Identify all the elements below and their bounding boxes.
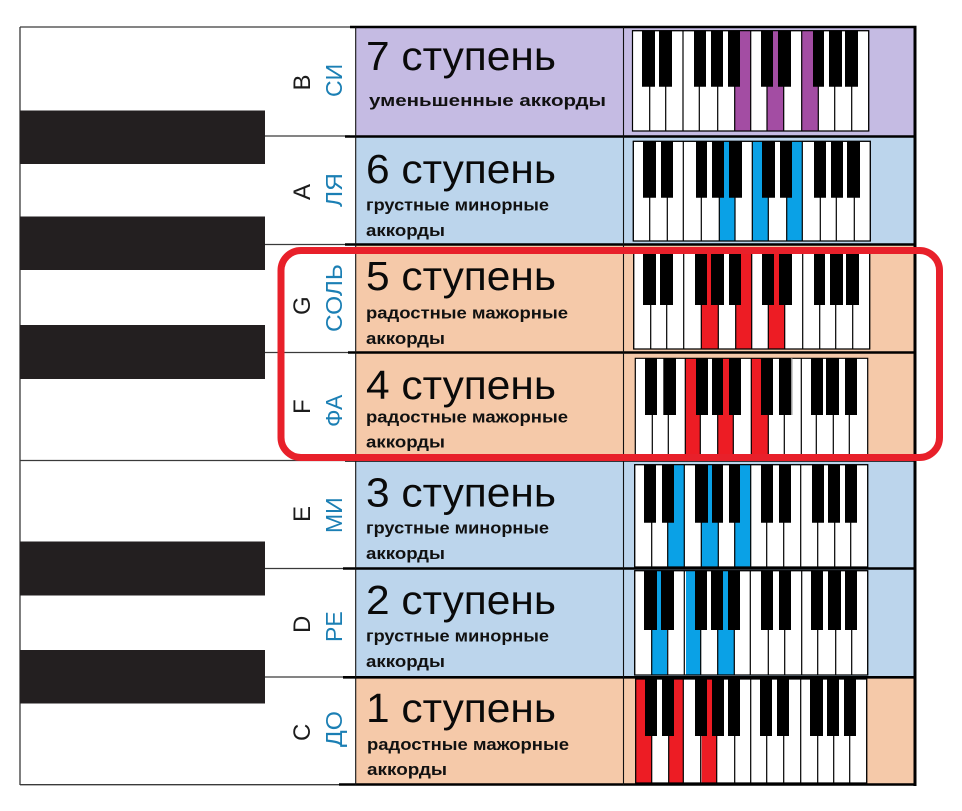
note label G: G xyxy=(289,296,316,315)
panel: 5th degree background xyxy=(356,244,915,352)
note label D: D xyxy=(289,616,316,633)
description: sad minor chords: аккорды xyxy=(366,545,445,563)
row: 6th degree xyxy=(289,136,915,244)
panel: 3rd degree background xyxy=(356,460,915,568)
heading: 6 ступень: 6 ступень xyxy=(366,146,556,192)
description: happy major chords: аккорды xyxy=(367,761,447,779)
heading: 7 ступень: 7 ступень xyxy=(366,33,556,79)
note label ЛЯ: ЛЯ xyxy=(321,173,347,207)
note label РЕ: РЕ xyxy=(321,611,347,642)
red highlight frame around degrees 4 and 5 xyxy=(281,250,940,458)
description: sad minor chords: аккорды xyxy=(366,222,445,240)
keyboard: 1st degree chords xyxy=(636,679,867,783)
row: 2nd degree xyxy=(289,568,915,677)
row: 7th degree xyxy=(289,27,915,136)
note label A: A xyxy=(289,184,316,200)
note label МИ: МИ xyxy=(321,497,347,533)
keyboard: 5th degree chords xyxy=(634,250,870,349)
description: sad minor chords xyxy=(366,196,549,240)
description: happy major chords xyxy=(366,304,568,348)
note label C: C xyxy=(289,724,316,741)
description: happy major chords xyxy=(367,736,569,779)
description: happy major chords: радостные мажорные xyxy=(367,736,569,754)
panel: 1st degree background xyxy=(356,677,915,784)
keyboard: 2nd degree chords xyxy=(635,571,868,675)
description: sad minor chords: аккорды xyxy=(366,653,445,671)
note label ФА: ФА xyxy=(321,394,347,427)
description: happy major chords: аккорды xyxy=(366,330,445,348)
description: sad minor chords: грустные минорные xyxy=(366,628,549,646)
heading: 5 ступень: 5 ступень xyxy=(366,253,556,299)
row: 4th degree xyxy=(289,352,915,460)
heading: 2 ступень: 2 ступень xyxy=(366,577,556,623)
row: 3rd degree xyxy=(289,460,915,568)
description: sad minor chords xyxy=(366,520,549,563)
heading: 1 ступень: 1 ступень xyxy=(366,685,556,731)
keyboard: 4th degree chords xyxy=(635,358,868,456)
row: 1st degree xyxy=(289,677,915,784)
panel: 6th degree background xyxy=(356,136,915,244)
panel: 7th degree background xyxy=(356,27,915,136)
table grid lines xyxy=(339,26,916,786)
big piano keyboard on the left xyxy=(20,27,356,785)
note label F: F xyxy=(289,399,316,414)
description: sad minor chords xyxy=(366,628,549,671)
panel: 4th degree background xyxy=(356,352,915,460)
note label СИ: СИ xyxy=(321,64,347,97)
description: happy major chords xyxy=(366,408,568,452)
keyboard: 6th degree chords xyxy=(633,141,870,241)
note label СОЛЬ: СОЛЬ xyxy=(321,264,347,332)
description: happy major chords: аккорды xyxy=(366,434,445,452)
note label E: E xyxy=(289,506,316,522)
keyboard: 7th degree chords xyxy=(632,31,869,131)
panel: 2nd degree background xyxy=(356,568,915,677)
note label ДО: ДО xyxy=(321,711,347,747)
description: happy major chords: радостные мажорные xyxy=(366,408,568,426)
description: sad minor chords: грустные минорные xyxy=(366,520,549,538)
row: 5th degree xyxy=(289,244,915,352)
keyboard: 3rd degree chords xyxy=(635,465,868,567)
heading: 3 ступень: 3 ступень xyxy=(366,470,556,516)
description: diminished chords: уменьшенные аккорды xyxy=(369,92,606,110)
description: happy major chords: радостные мажорные xyxy=(366,304,568,322)
description: sad minor chords: грустные минорные xyxy=(366,196,549,214)
heading: 4 ступень: 4 ступень xyxy=(366,362,556,408)
note label B: B xyxy=(289,74,316,90)
